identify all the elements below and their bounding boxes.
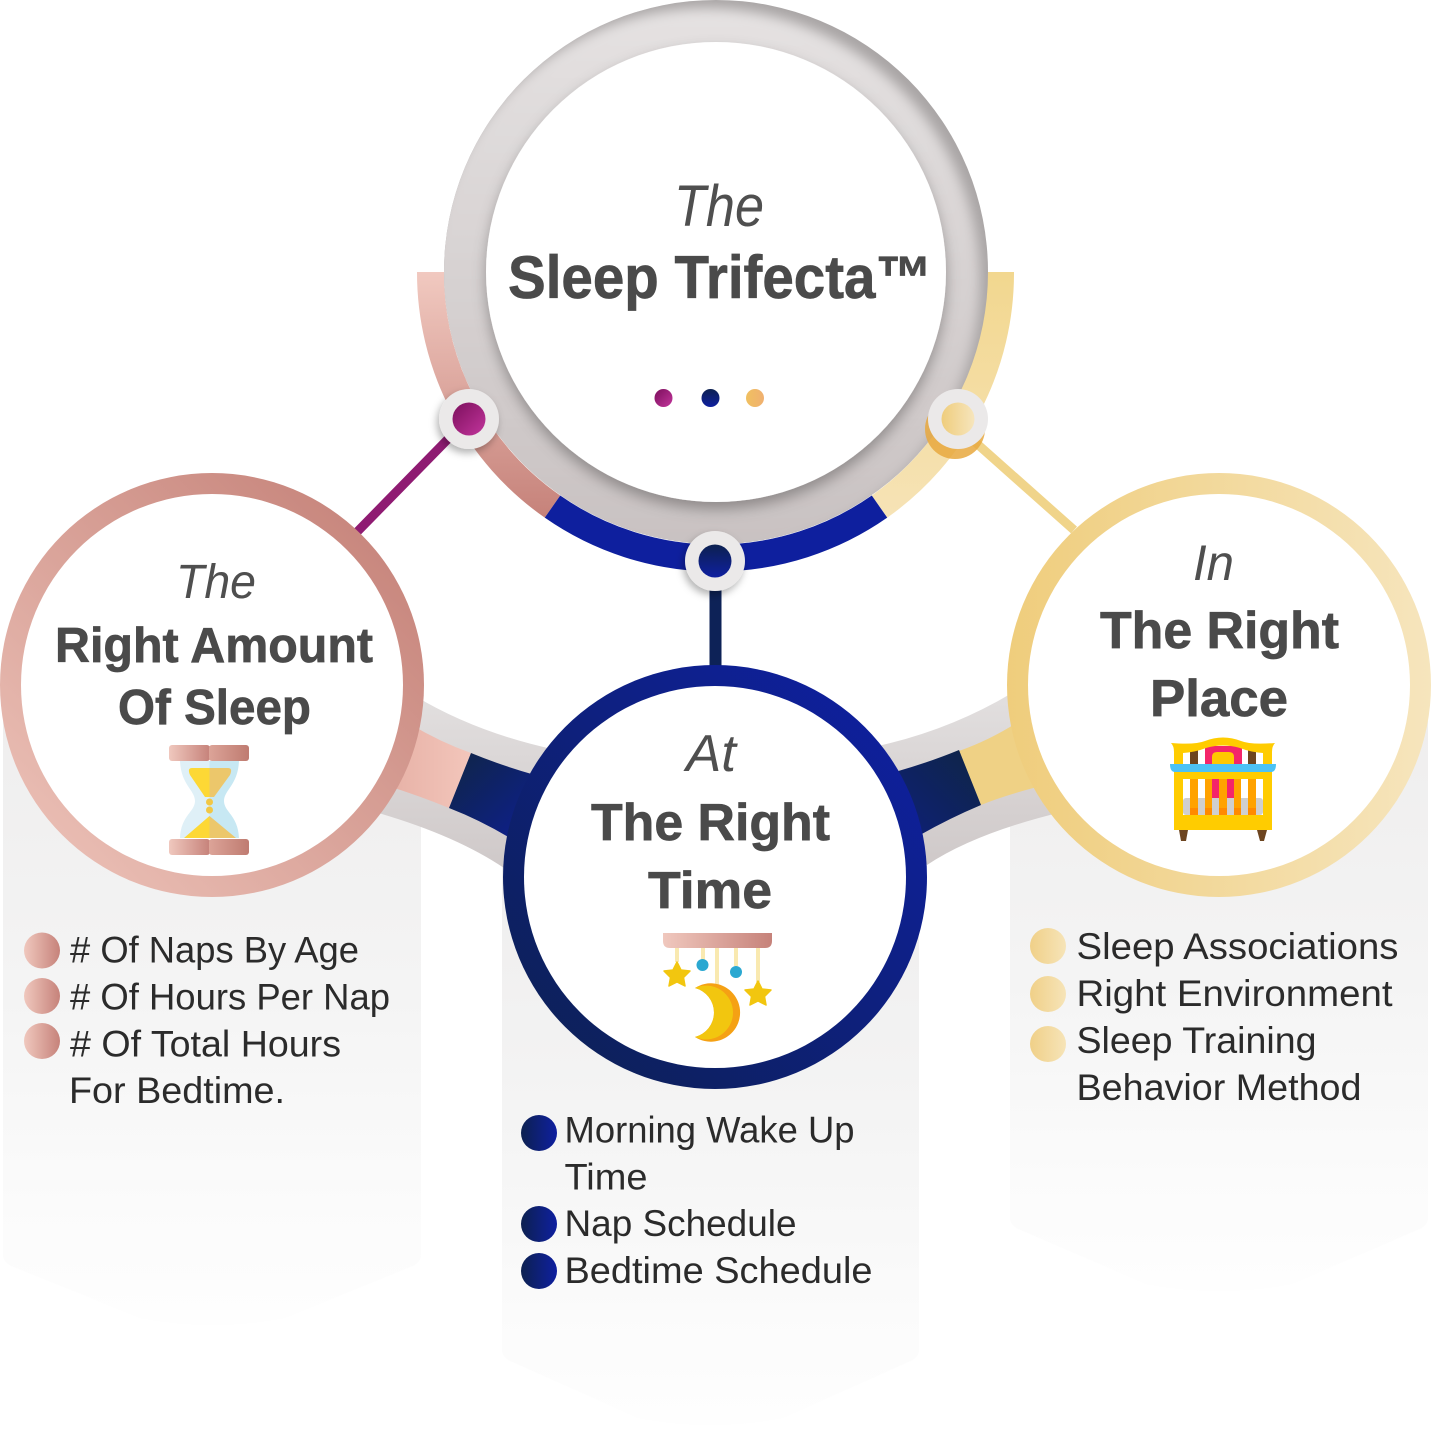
list text 2: Time	[564, 1156, 648, 1198]
main title: Sleep Trifecta: Sleep Trifecta™	[508, 244, 932, 311]
circle: right time	[503, 665, 927, 1089]
circle: right amount of sleep	[0, 473, 424, 897]
panel: right time background	[502, 860, 919, 1425]
bullet 2	[1030, 976, 1066, 1012]
connector line: navy	[710, 585, 722, 670]
main title: The: The	[674, 174, 764, 239]
list: right place	[1030, 926, 1398, 1108]
list: right amount of sleep	[24, 930, 390, 1111]
connector line: purple	[357, 438, 449, 532]
main inner disc	[486, 42, 946, 502]
list text 1: Sleep Associations	[1076, 926, 1398, 967]
connector line: yellow	[975, 442, 1074, 530]
list text 3: # Of Total Hours	[70, 1024, 341, 1064]
icon: baby mobile	[663, 933, 772, 1042]
heading: In The Right Place: In	[1193, 535, 1234, 591]
connector band: left	[375, 696, 552, 868]
heading: The Right Amount Of Sleep: Of Sleep	[118, 681, 311, 735]
heading: At The Right Time: The Right	[591, 794, 830, 852]
list text 4: For Bedtime.	[69, 1070, 285, 1111]
list text 2: Right Environment	[1076, 973, 1393, 1014]
three dots	[654, 389, 764, 407]
list text 3: Sleep Training	[1076, 1020, 1316, 1061]
arc: yellow segment	[880, 272, 1001, 507]
node: yellow	[925, 389, 988, 459]
heading: At The Right Time: Time	[648, 862, 772, 920]
heading: In The Right Place: Place	[1150, 670, 1288, 728]
heading: At The Right Time: At	[683, 725, 739, 783]
bullet 3	[1030, 1026, 1066, 1062]
icon: hourglass	[169, 745, 249, 855]
heading: The Right Amount Of Sleep	[55, 556, 373, 735]
panel: right place background	[1010, 720, 1428, 1291]
bullet 1	[1030, 928, 1066, 964]
heading: In The Right Place	[1100, 535, 1339, 728]
panel: right amount background	[3, 720, 421, 1325]
bullet 2	[24, 978, 60, 1014]
bullet 1	[521, 1115, 557, 1151]
list text 2: # Of Hours Per Nap	[70, 976, 390, 1018]
list text 4: Behavior Method	[1076, 1067, 1362, 1108]
bullet 2	[521, 1206, 557, 1242]
main circle: The Sleep Trifecta	[432, 0, 992, 556]
heading: The Right Amount Of Sleep: Right Amount	[55, 619, 373, 673]
list text 3: Nap Schedule	[564, 1203, 796, 1244]
list text 1: Morning Wake Up	[564, 1110, 854, 1150]
connector band: right	[878, 693, 1062, 865]
list text 1: # Of Naps By Age	[70, 930, 359, 970]
bullet 3	[24, 1023, 60, 1059]
list: right time	[521, 1110, 872, 1291]
bullet 3	[521, 1253, 557, 1289]
list text 4: Bedtime Schedule	[564, 1250, 872, 1291]
heading: In The Right Place: The Right	[1100, 602, 1339, 660]
heading: The Right Amount Of Sleep: The	[176, 556, 256, 609]
heading: At The Right Time	[591, 725, 830, 920]
arc: blue segment	[552, 507, 880, 558]
node: navy	[685, 531, 745, 591]
node: purple	[439, 389, 499, 449]
circle: right place	[1007, 473, 1431, 897]
arc: salmon segment	[430, 272, 552, 507]
icon: crib	[1170, 738, 1276, 841]
main ring	[432, 0, 992, 556]
bullet 1	[24, 932, 60, 968]
